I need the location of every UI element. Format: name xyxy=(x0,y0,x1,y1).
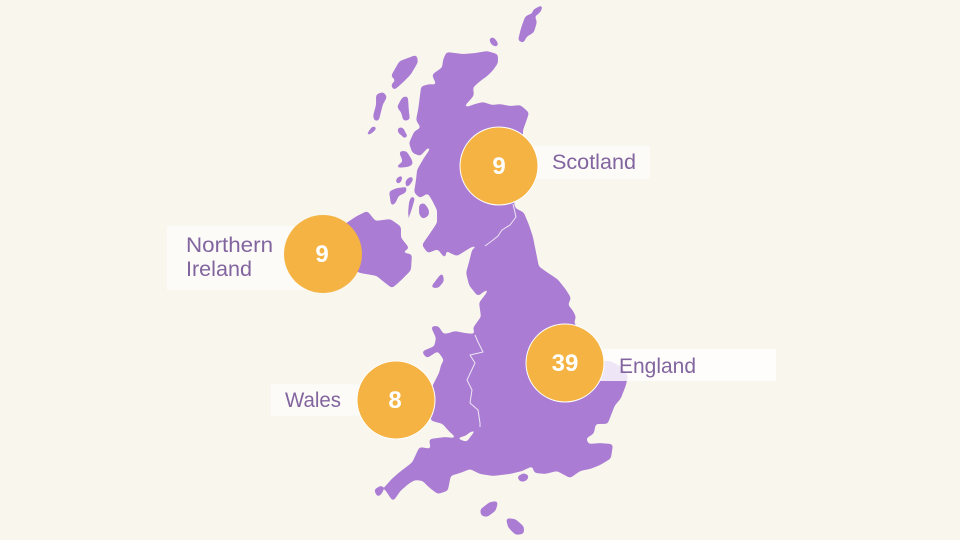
marker: Wales 8 xyxy=(357,361,435,439)
marker: Northern Ireland 9 xyxy=(284,215,362,293)
label: Wales xyxy=(271,384,381,416)
marker: Wales 8: 8 xyxy=(388,387,402,414)
marker: England 39 xyxy=(526,324,604,402)
region: Wales xyxy=(423,327,483,437)
label: Northern Ireland xyxy=(167,226,317,290)
marker: Northern Ireland 9: 9 xyxy=(315,241,329,268)
marker: Scotland 9: 9 xyxy=(492,153,506,180)
label: England: England xyxy=(619,355,696,378)
region borders xyxy=(467,204,516,427)
islands xyxy=(367,6,542,534)
label: Wales: Wales xyxy=(285,389,341,412)
label: England xyxy=(585,349,776,381)
label: Scotland: Scotland xyxy=(552,151,636,174)
marker: Scotland 9 xyxy=(460,127,538,205)
map of the UK xyxy=(345,6,627,534)
region: Scotland xyxy=(410,52,528,257)
marker: England 39: 39 xyxy=(552,350,578,377)
region: Northern Ireland xyxy=(345,212,411,287)
region: England xyxy=(385,208,627,500)
label: Northern Ireland: Northern xyxy=(186,234,273,257)
label: Scotland xyxy=(520,146,650,179)
label: Northern Ireland: Ireland xyxy=(186,258,252,281)
